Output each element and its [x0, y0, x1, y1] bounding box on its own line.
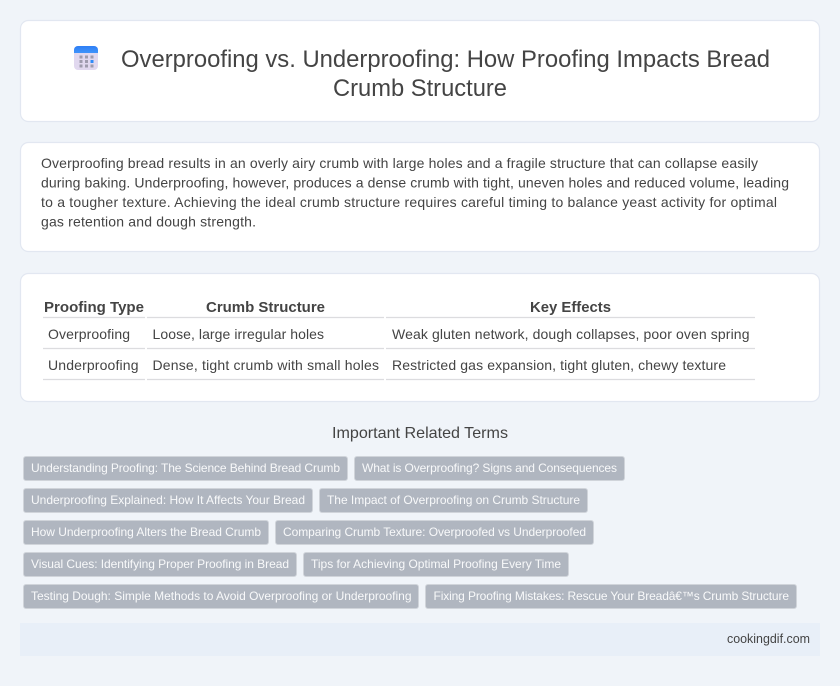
tag	[24, 488, 312, 512]
text block: summary paragraph: to a tougher texture. Achieving the ideal crumb structure requires careful timing to balance yeast activity for optimal	[41, 194, 777, 210]
tag	[354, 456, 624, 480]
table header: Crumb Structure	[206, 300, 325, 316]
tag	[276, 520, 594, 544]
table row: overproofing: Weak gluten network, dough collapses, poor oven spring	[392, 326, 750, 342]
title: Crumb Structure	[333, 75, 507, 102]
heading: related terms: Important Related Terms	[332, 425, 508, 442]
tag: Testing Dough: Simple Methods to Avoid Overproofing or Underproofing	[31, 589, 412, 603]
table row: overproofing: Overproofing	[48, 326, 130, 342]
text block: summary paragraph: during baking. Underproofing, however, produces a dense crumb with tight, uneven holes and reduced volume, leading	[41, 174, 789, 190]
tag: Understanding Proofing: The Science Behind Bread Crumb	[31, 461, 340, 475]
table header: Proofing Type	[44, 300, 144, 316]
text block: summary paragraph: gas retention and dough strength.	[41, 214, 256, 230]
tag: Underproofing Explained: How It Affects Your Bread	[31, 493, 305, 507]
tag	[304, 552, 568, 576]
tag: Fixing Proofing Mistakes: Rescue Your Breadâ€™s Crumb Structure	[434, 589, 789, 603]
tag	[24, 520, 268, 544]
table row: underproofing: Restricted gas expansion, tight gluten, chewy texture	[392, 357, 726, 373]
table row: underproofing	[43, 357, 755, 380]
tag	[320, 488, 588, 512]
icon: calendar	[74, 46, 98, 70]
title	[121, 46, 770, 102]
table row: underproofing: Underproofing	[48, 357, 138, 373]
panel: title card	[20, 20, 820, 122]
tag	[24, 552, 296, 576]
footer: cookingdif.com	[727, 631, 810, 646]
tag: The Impact of Overproofing on Crumb Structure	[327, 493, 580, 507]
tag	[24, 584, 418, 608]
table row: overproofing: Loose, large irregular holes	[152, 326, 324, 342]
table header	[43, 300, 755, 318]
table header: Key Effects	[530, 300, 611, 316]
table row: underproofing: Dense, tight crumb with small holes	[152, 357, 379, 373]
tag: How Underproofing Alters the Bread Crumb	[31, 525, 261, 539]
tag: Comparing Crumb Texture: Overproofed vs Underproofed	[283, 525, 586, 539]
related terms tags	[24, 456, 796, 608]
table row: overproofing	[43, 326, 755, 348]
tag	[24, 456, 348, 480]
tag: Tips for Achieving Optimal Proofing Every Time	[311, 557, 561, 571]
tag: Visual Cues: Identifying Proper Proofing in Bread	[31, 557, 289, 571]
footer	[20, 623, 820, 656]
tag	[426, 584, 796, 608]
panel: comparison table	[20, 274, 820, 402]
text block: summary paragraph	[41, 155, 789, 230]
tag: What is Overproofing? Signs and Consequences	[362, 461, 617, 475]
title: Overproofing vs. Underproofing: How Proofing Impacts Bread	[121, 46, 770, 73]
panel: summary	[20, 142, 820, 252]
text block: summary paragraph: Overproofing bread results in an overly airy crumb with large holes and a fragile structure that can collapse easily	[41, 155, 758, 171]
